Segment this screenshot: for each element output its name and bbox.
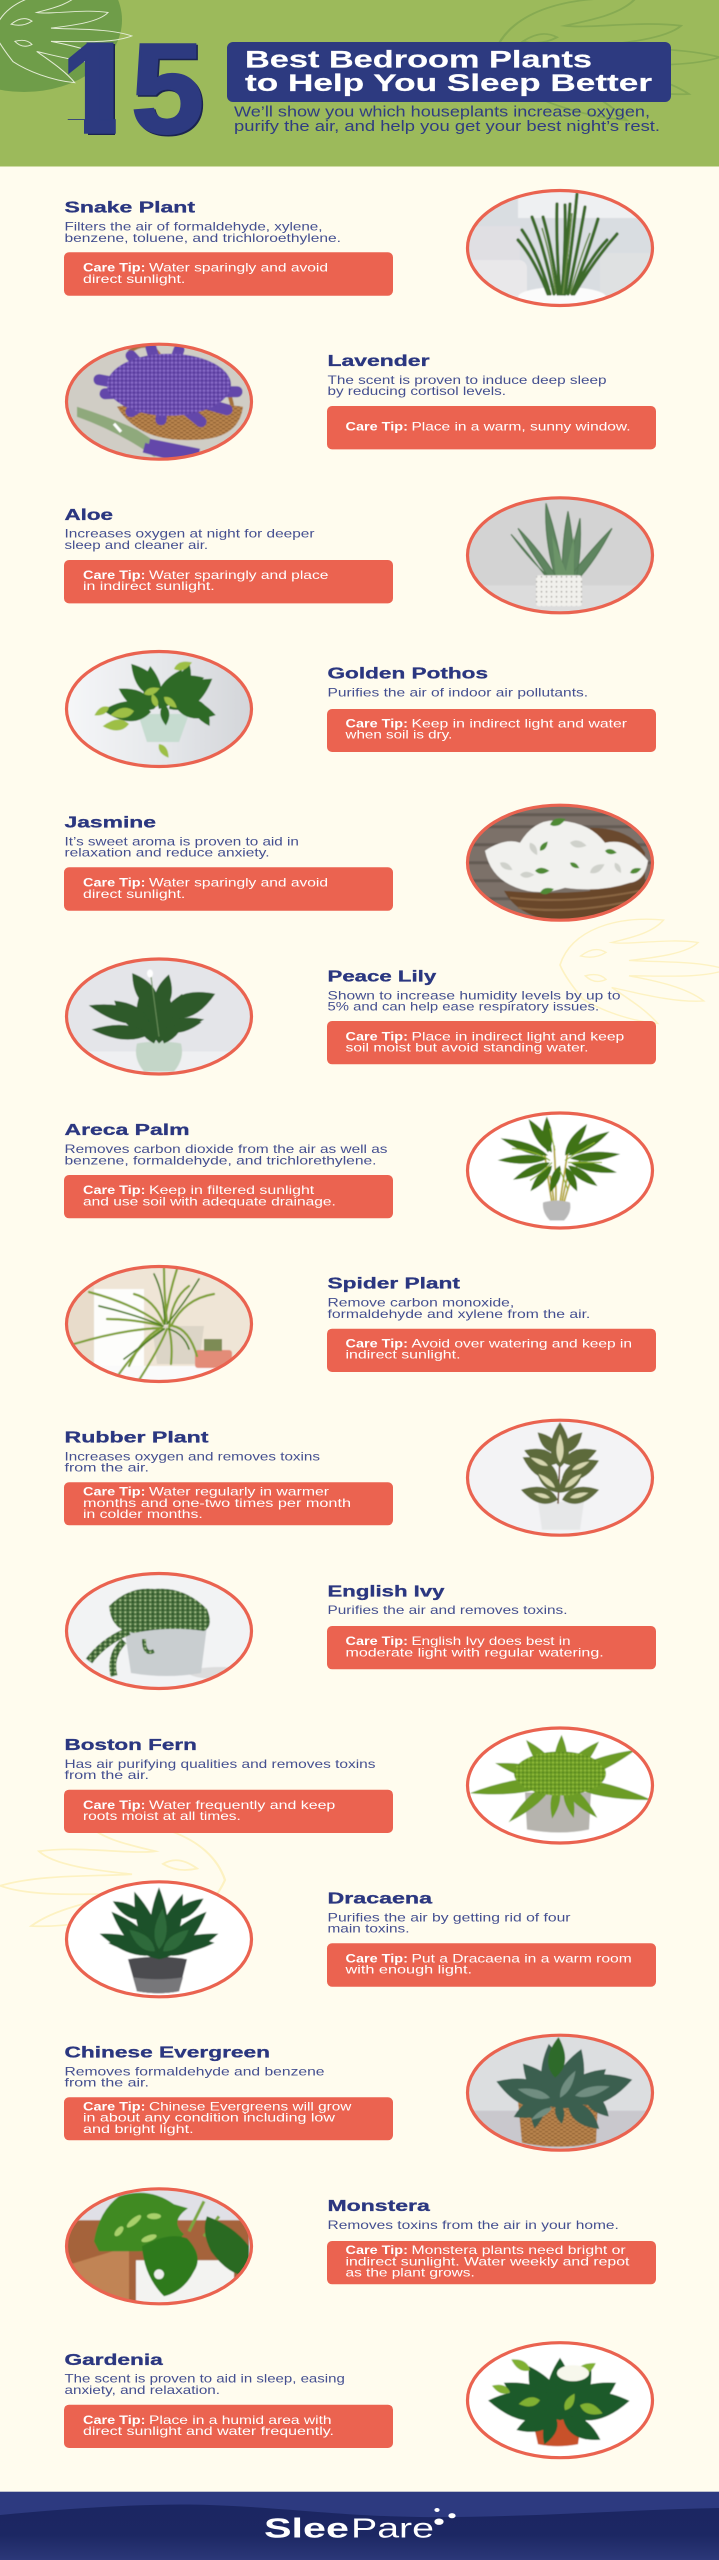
care tip: Care Tip: (83, 1183, 145, 1197)
footer wave (0, 2505, 719, 2560)
heading: Areca Palm (64, 1122, 190, 1139)
description: by reducing cortisol levels. (328, 384, 506, 398)
description: Remove carbon monoxide, (328, 1296, 514, 1310)
care tip: when soil is dry. (344, 728, 452, 742)
panel: Spider Plant (64, 1264, 656, 1386)
photo: areca palm (465, 1110, 655, 1230)
care tip: in about any condition including low (83, 2111, 335, 2125)
care tip: Care Tip: (346, 1634, 408, 1648)
description (328, 988, 621, 1014)
footer band (0, 2492, 719, 2560)
description (64, 2372, 345, 2397)
intro text: We’ll show you which houseplants increase oxygen, (234, 104, 650, 120)
panel: Lavender (64, 342, 656, 462)
care tip: Avoid over watering and keep in (412, 1336, 632, 1350)
description: Increases oxygen at night for deeper (64, 527, 314, 541)
heading: English Ivy (328, 1583, 445, 1600)
description: Shown to increase humidity levels by up to (328, 988, 621, 1002)
care tip (327, 709, 656, 752)
photo: lavender (64, 342, 254, 462)
description (64, 2064, 325, 2089)
description: main toxins. (328, 1921, 410, 1935)
big number 15 (68, 42, 204, 136)
photo: golden pothos (64, 649, 254, 769)
care tip: Keep in indirect light and water (412, 716, 627, 730)
care tip: direct sunlight. (83, 887, 185, 901)
care tip (327, 2241, 656, 2284)
intro text (234, 104, 660, 135)
description: Has air purifying qualities and removes toxins (64, 1757, 376, 1771)
care tip: Care Tip: (346, 1951, 408, 1965)
care tip: Water sparingly and place (149, 568, 329, 582)
care tip: direct sunlight. (83, 272, 185, 286)
care tip: English Ivy does best in (412, 1634, 570, 1648)
care tip (327, 1943, 656, 1987)
care tip: Put a Dracaena in a warm room (412, 1951, 632, 1965)
description: Removes formaldehyde and benzene (64, 2064, 325, 2078)
photo: english ivy (64, 1571, 254, 1691)
care tip: as the plant grows. (346, 2266, 475, 2280)
panel: English Ivy (64, 1571, 656, 1691)
description: Filters the air of formaldehyde, xylene, (64, 220, 322, 234)
description: Purifies the air and removes toxins. (328, 1603, 568, 1617)
care tip: Place in a warm, sunny window. (412, 420, 630, 434)
decoration: cream leaf outline left (0, 1821, 225, 1955)
description: The scent is proven to induce deep sleep (328, 373, 607, 387)
panel: Chinese Evergreen (64, 2033, 655, 2156)
logo: SleePare (264, 2508, 456, 2543)
description: The scent is proven to aid in sleep, easing (64, 2372, 345, 2386)
heading: Golden Pothos (328, 666, 488, 683)
panel: Rubber Plant (64, 1418, 655, 1538)
heading: Lavender (328, 353, 430, 370)
title banner: Best Bedroom Plants (245, 46, 592, 74)
description: Purifies the air of indoor air pollutants. (328, 686, 588, 700)
panel: Aloe (64, 495, 655, 615)
care tip: Care Tip: (83, 1798, 145, 1812)
description: formaldehyde and xylene from the air. (328, 1307, 590, 1321)
description (64, 220, 341, 245)
care tip (64, 2097, 393, 2140)
panel: Areca Palm (64, 1110, 655, 1230)
care tip: soil moist but avoid standing water. (346, 1040, 588, 1054)
description: from the air. (64, 2075, 149, 2089)
care tip: months and one-two times per month (83, 1496, 351, 1510)
care tip: moderate light with regular watering. (346, 1645, 604, 1659)
intro text: purify the air, and help you get your best night’s rest. (234, 118, 660, 135)
care tip: Water sparingly and avoid (149, 261, 328, 275)
heading: Rubber Plant (64, 1429, 208, 1446)
photo: gardenia (465, 2340, 655, 2460)
description: Removes toxins from the air in your home. (328, 2218, 619, 2232)
care tip: Care Tip: (83, 1485, 145, 1499)
care tip (327, 406, 656, 449)
description: anxiety, and relaxation. (64, 2383, 220, 2397)
heading: Snake Plant (64, 200, 195, 217)
care tip (64, 1482, 393, 1525)
panel: Monstera (64, 2186, 656, 2308)
heading: Dracaena (328, 1890, 433, 1907)
care tip (327, 1626, 656, 1669)
care tip: Water sparingly and avoid (149, 876, 328, 890)
care tip: Care Tip: (83, 876, 145, 890)
care tip: Chinese Evergreens will grow (149, 2099, 352, 2113)
description: It’s sweet aroma is proven to aid in (64, 834, 299, 848)
care tip: Care Tip: (346, 716, 408, 730)
big number 15: 5 (132, 19, 206, 162)
description: Increases oxygen and removes toxins (64, 1449, 320, 1463)
photo: rubber plant (465, 1418, 655, 1538)
care tip: Keep in filtered sunlight (149, 1183, 315, 1197)
care tip: direct sunlight and water frequently. (83, 2424, 334, 2438)
description: Removes carbon dioxide from the air as well as (64, 1142, 388, 1156)
heading: Gardenia (64, 2352, 163, 2369)
heading: Jasmine (64, 814, 157, 831)
panel: Golden Pothos (64, 649, 656, 769)
photo: chinese evergreen (465, 2033, 655, 2156)
care tip: with enough light. (344, 1962, 472, 1976)
panel: Boston Fern (64, 1726, 655, 1846)
care tip: Care Tip: (346, 420, 408, 434)
description: Purifies the air by getting rid of four (328, 1910, 571, 1924)
care tip: roots moist at all times. (83, 1809, 241, 1823)
decoration: dark green circle (0, 0, 122, 92)
description (328, 1296, 590, 1321)
description: relaxation and reduce anxiety. (64, 846, 270, 860)
photo: spider plant (64, 1264, 254, 1386)
description: from the air. (64, 1768, 149, 1782)
care tip: in indirect sunlight. (83, 579, 215, 593)
heading: Boston Fern (64, 1737, 197, 1754)
description: benzene, toluene, and trichloroethylene. (64, 231, 341, 245)
panel: Gardenia (64, 2340, 655, 2460)
logo: SleePare: Pare (351, 2512, 434, 2543)
care tip: Care Tip: (346, 1029, 408, 1043)
description (64, 1757, 376, 1782)
care tip: Care Tip: (83, 261, 145, 275)
heading: Chinese Evergreen (64, 2044, 270, 2061)
title banner (227, 42, 671, 102)
photo: jasmine (465, 803, 655, 923)
description (64, 527, 314, 552)
care tip (64, 1790, 393, 1833)
care tip: Care Tip: (83, 568, 145, 582)
photo: dracaena (64, 1879, 254, 1999)
care tip (64, 560, 393, 603)
description (328, 1910, 571, 1935)
description: sleep and cleaner air. (64, 538, 208, 552)
description (64, 834, 299, 860)
description (64, 1142, 388, 1167)
care tip: Water regularly in warmer (149, 1485, 329, 1499)
big number 15: 1 (62, 18, 118, 161)
care tip: Care Tip: (83, 2099, 145, 2113)
description (328, 373, 607, 398)
heading: Peace Lily (328, 968, 437, 985)
header band (0, 0, 719, 166)
title banner: to Help You Sleep Better (245, 70, 652, 97)
decoration: cream leaf outline right (560, 919, 719, 1024)
care tip: Care Tip: (346, 2243, 408, 2257)
heading: Monstera (328, 2198, 430, 2215)
care tip: indirect sunlight. Water weekly and repot (346, 2254, 630, 2268)
care tip: Care Tip: (346, 1336, 408, 1350)
heading: Aloe (64, 507, 114, 524)
care tip (64, 2405, 393, 2448)
description (64, 1449, 320, 1475)
care tip: Place in a humid area with (149, 2413, 332, 2427)
decoration: green leaf outline (495, 0, 719, 120)
panel: Dracaena (64, 1879, 656, 1999)
care tip: Place in indirect light and keep (412, 1029, 625, 1043)
care tip: indirect sunlight. (346, 1347, 460, 1361)
big number 15: 5 (131, 18, 204, 160)
photo: monstera (64, 2186, 254, 2308)
care tip: and use soil with adequate drainage. (83, 1194, 336, 1208)
photo: peace lily (64, 956, 254, 1076)
description: benzene, formaldehyde, and trichlorethylene. (64, 1153, 376, 1167)
care tip: Monstera plants need bright or (412, 2243, 626, 2257)
photo: aloe (465, 495, 655, 615)
logo: SleePare: Slee (264, 2512, 349, 2543)
photo: boston fern (465, 1726, 655, 1846)
panel: Peace Lily (64, 956, 656, 1076)
care tip (64, 867, 393, 911)
care tip: in colder months. (83, 1507, 203, 1521)
care tip: Water frequently and keep (149, 1798, 336, 1812)
description: from the air. (64, 1461, 149, 1475)
care tip (327, 1021, 656, 1064)
care tip (64, 252, 393, 296)
description: 5% and can help ease respiratory issues. (328, 1000, 599, 1014)
care tip (327, 1329, 656, 1372)
panel: Jasmine (64, 803, 655, 923)
decoration: white leaf outline (0, 0, 132, 83)
photo: snake plant (465, 188, 660, 310)
care tip: and bright light. (83, 2122, 194, 2136)
panel: Snake Plant (64, 188, 660, 310)
heading: Spider Plant (328, 1276, 460, 1293)
care tip (64, 1175, 393, 1218)
care tip: Care Tip: (83, 2413, 145, 2427)
